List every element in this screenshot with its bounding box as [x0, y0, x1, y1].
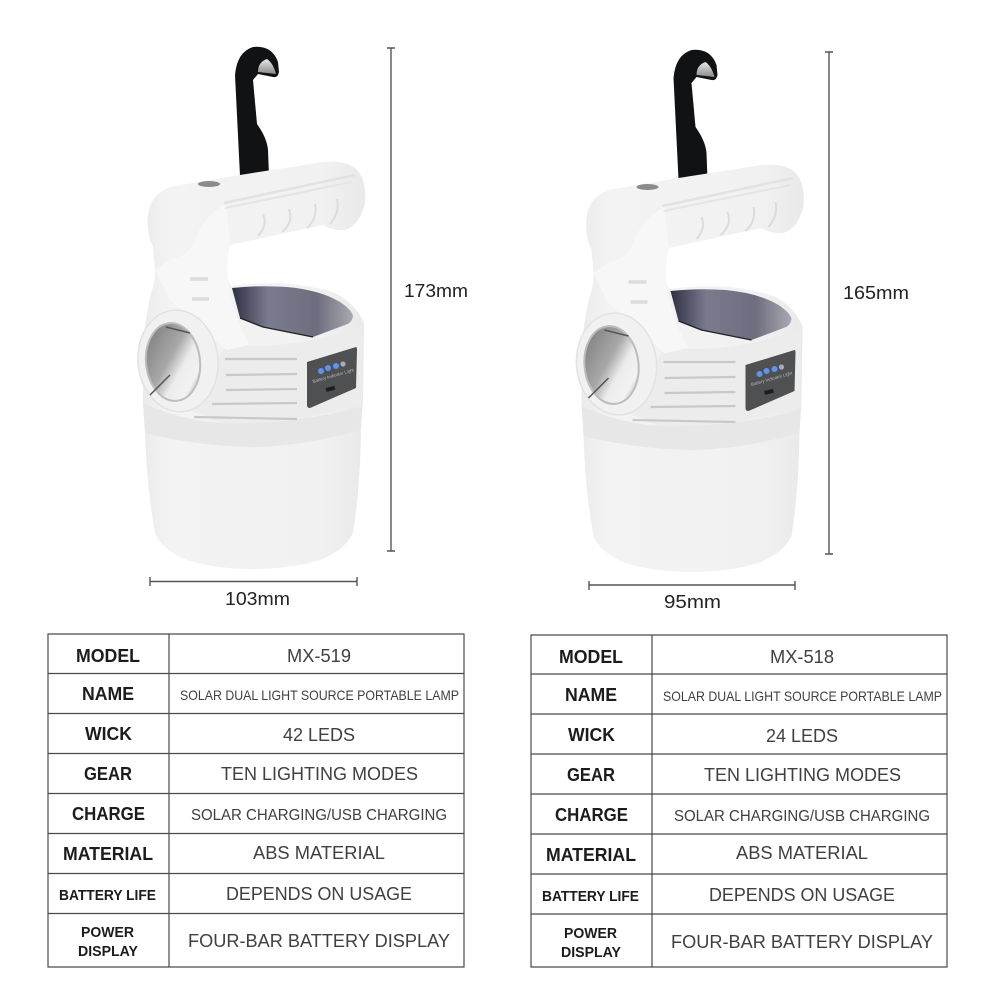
- spec table: MX-518: [531, 635, 947, 967]
- spec table: MX-519: WICK: [85, 724, 132, 744]
- spec table: MX-519: DISPLAY: [78, 943, 138, 960]
- spec table: MX-519: MODEL: [76, 646, 140, 666]
- spec table: MX-518: CHARGE: [555, 805, 628, 825]
- spec table: MX-518: SOLAR DUAL LIGHT SOURCE PORTABLE LAMP: [663, 688, 942, 704]
- spec table: MX-518: 24 LEDS: [766, 726, 838, 746]
- product photo: MX-518 lamp: [571, 50, 804, 572]
- spec table: MX-519: BATTERY LIFE: [59, 887, 156, 904]
- dimension: MX-519 height: [387, 48, 468, 551]
- spec table: MX-519: TEN LIGHTING MODES: [221, 764, 418, 784]
- spec table: MX-519: SOLAR CHARGING/USB CHARGING: [191, 807, 447, 824]
- spec table: MX-518: SOLAR CHARGING/USB CHARGING: [674, 808, 930, 825]
- spec table: MX-519: MX-519: [287, 646, 351, 666]
- spec table: MX-519: GEAR: [84, 764, 132, 784]
- spec table: MX-518: DEPENDS ON USAGE: [709, 885, 895, 905]
- spec table: MX-519: ABS MATERIAL: [253, 843, 385, 863]
- spec table: MX-518: BATTERY LIFE: [542, 888, 639, 905]
- dimension: MX-518 width: [589, 581, 795, 612]
- spec table: MX-518: TEN LIGHTING MODES: [704, 765, 901, 785]
- product photo: MX-519 lamp: Battery Indicator Light: [312, 367, 355, 384]
- spec table: MX-519: [48, 634, 464, 967]
- spec table: MX-518: MX-518: [770, 647, 834, 667]
- dimension: MX-518 width: 95mm: [664, 592, 721, 612]
- dimension: MX-518 height: 165mm: [843, 283, 909, 303]
- spec table: MX-518: FOUR-BAR BATTERY DISPLAY: [671, 932, 933, 952]
- dimension: MX-518 height: [825, 52, 909, 554]
- spec table: MX-518: DISPLAY: [561, 944, 621, 961]
- spec table: MX-519: POWER: [81, 924, 134, 941]
- product photo: MX-518 lamp: Battery Indicator Light: [750, 370, 794, 387]
- dimension: MX-519 width: [150, 577, 357, 609]
- spec table: MX-519: NAME: [82, 684, 134, 704]
- spec table: MX-518: NAME: [565, 685, 617, 705]
- spec table: MX-519: MATERIAL: [63, 844, 153, 864]
- spec table: MX-518: POWER: [564, 925, 617, 942]
- dimension: MX-519 height: 173mm: [404, 281, 468, 301]
- dimension: MX-519 width: 103mm: [225, 589, 290, 609]
- spec table: MX-519: FOUR-BAR BATTERY DISPLAY: [188, 931, 450, 951]
- spec table: MX-519: SOLAR DUAL LIGHT SOURCE PORTABLE LAMP: [180, 687, 459, 703]
- spec table: MX-519: 42 LEDS: [283, 725, 355, 745]
- product photo: MX-519 lamp: [133, 47, 365, 569]
- spec table: MX-518: MATERIAL: [546, 845, 636, 865]
- spec table: MX-518: MODEL: [559, 647, 623, 667]
- spec table: MX-519: CHARGE: [72, 804, 145, 824]
- spec table: MX-519: DEPENDS ON USAGE: [226, 884, 412, 904]
- spec table: MX-518: WICK: [568, 725, 615, 745]
- spec table: MX-518: ABS MATERIAL: [736, 843, 868, 863]
- spec table: MX-518: GEAR: [567, 765, 615, 785]
